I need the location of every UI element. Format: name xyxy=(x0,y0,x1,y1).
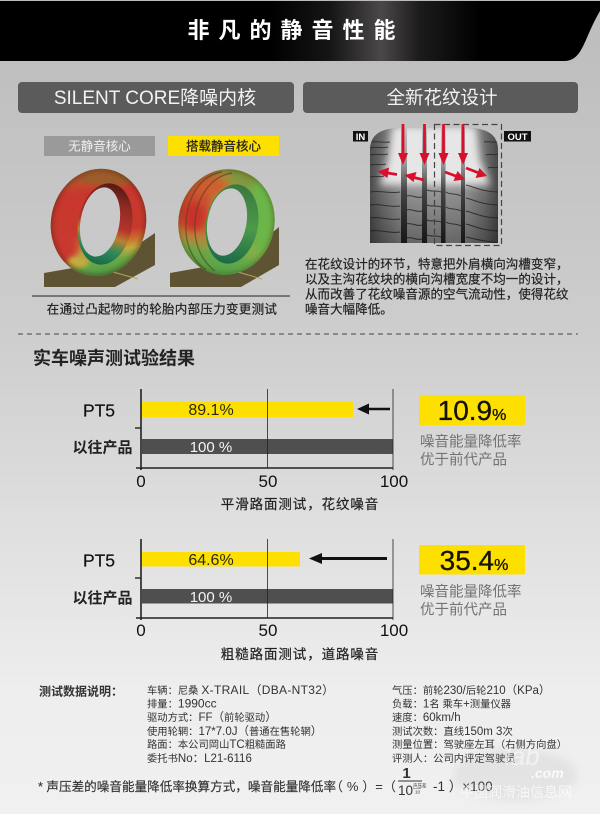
axis tick labels: 50 xyxy=(259,472,277,491)
tread description text: 噪音大幅降低。 xyxy=(305,302,393,316)
section header: new tread pattern: 全新花纹设计 xyxy=(386,87,498,108)
footnote formula: 1 xyxy=(402,765,411,782)
label: OUT: OUT xyxy=(507,132,528,143)
section header: new tread pattern xyxy=(303,82,578,113)
label: IN xyxy=(353,131,368,143)
bar: previous product 100%: 100 % xyxy=(190,589,232,606)
tread description text: 以及主沟花纹块的横向沟槽宽度不均一的设计， xyxy=(305,272,569,286)
callout: 10.9% xyxy=(419,395,525,468)
tread diagram xyxy=(370,124,502,246)
bar: PT5 64.6% xyxy=(142,552,300,569)
tire simulation: with silent core xyxy=(170,169,279,287)
category labels: PT5 xyxy=(83,400,115,420)
callout: 35.4%: 35.4% xyxy=(440,545,508,576)
bar: PT5 89.1% xyxy=(142,402,353,419)
footnote formula xyxy=(38,765,493,798)
footnote formula: （ % ）=（ xyxy=(330,779,396,794)
footnote formula: 10 xyxy=(398,783,413,798)
dashed divider xyxy=(18,333,578,335)
bar chart: rough road, road noise: 以往产品 xyxy=(72,589,133,607)
caption: rough road test: 粗糙路面测试，道路噪音 xyxy=(221,646,379,662)
callout: 35.4% xyxy=(419,545,525,618)
axis tick labels: 50 xyxy=(259,621,277,640)
callout: 10.9%: 噪音能量降低率 xyxy=(420,434,522,450)
footnote formula: -1 ）×100 xyxy=(433,779,493,794)
axis tick labels xyxy=(136,472,408,491)
callout: 35.4%: 优于前代产品 xyxy=(420,602,507,618)
test data left column: 路面：本公司岡山TC粗糙面路 xyxy=(147,738,287,751)
axis tick labels: 0 xyxy=(136,621,146,640)
test data right column: 气压：前轮230/后轮210（KPa） xyxy=(392,684,550,697)
callout: 35.4%: 噪音能量降低率 xyxy=(420,584,522,600)
label: OUT xyxy=(504,131,531,143)
bar chart: rough road, road noise xyxy=(72,539,408,640)
callout: 10.9%: 优于前代产品 xyxy=(420,452,507,468)
test data left column: 车辆：尼桑 X-TRAIL（DBA-NT32） xyxy=(147,683,334,697)
bar: PT5 64.6%: 64.6% xyxy=(188,552,234,569)
test data right column xyxy=(392,684,567,765)
section header: silent core: SILENT CORE降噪内核 xyxy=(54,87,256,109)
test data left column: 驱动方式：FF（前轮驱动） xyxy=(147,711,277,724)
footnote formula: 10 xyxy=(415,790,421,794)
tread description text: 在花纹设计的环节，特意把外肩横向沟槽变窄， xyxy=(305,256,569,272)
axis tick labels: 100 xyxy=(380,621,408,640)
caption rule xyxy=(32,295,290,297)
bar: previous product 100% xyxy=(142,439,393,456)
test data right column: 评测人：公司内评定驾驶员 xyxy=(392,752,516,765)
bar chart: smooth road, pattern noise: 以往产品 xyxy=(72,438,133,456)
test data right column: 测量位置：驾驶座左耳（右侧方向盘） xyxy=(392,738,567,751)
test data right column: 速度：60km/h xyxy=(392,711,461,724)
bar: previous product 100% xyxy=(142,589,393,606)
label: IN: IN xyxy=(356,132,365,143)
watermark: 中国润滑油信息网 xyxy=(460,784,572,800)
tread description text: 从而改善了花纹噪音源的空气流动性，使得花纹 xyxy=(305,286,569,302)
caption: tire pressure test: 在通过凸起物时的轮胎内部压力变更测试 xyxy=(47,302,277,316)
tread description text xyxy=(305,256,569,316)
test data left column: 使用轮辋：17*7.0J（普通在售轮辋） xyxy=(147,725,322,738)
heading: real vehicle noise test results: 实车噪声测试验结果 xyxy=(33,348,195,368)
axis tick labels xyxy=(136,621,408,640)
arrow xyxy=(309,553,387,564)
test data left column xyxy=(147,683,334,765)
axis tick labels: 0 xyxy=(136,472,146,491)
test data heading: 测试数据说明： xyxy=(39,684,123,698)
watermark: .com xyxy=(531,765,564,781)
bar chart: smooth road, pattern noise xyxy=(72,389,408,491)
watermark: lab xyxy=(505,741,540,771)
test data left column: 排量：1990cc xyxy=(147,696,217,710)
bar: PT5 89.1%: 89.1% xyxy=(188,402,234,419)
test data right column: 负载：1名 乘车+测量仪器 xyxy=(392,698,511,710)
label: with silent core: 搭载静音核心 xyxy=(186,138,261,154)
bar: previous product 100%: 100 % xyxy=(190,439,232,456)
header banner xyxy=(0,1,600,61)
arrow xyxy=(357,404,390,414)
title: 非凡的静音性能 xyxy=(187,18,405,43)
label: without silent core xyxy=(44,136,155,156)
test data right column: 测试次数：直线150m 3次 xyxy=(392,725,513,738)
footnote formula: 声压差 xyxy=(413,782,427,789)
label: without silent core: 无静音核心 xyxy=(68,138,131,154)
red arrows xyxy=(378,124,487,182)
axis tick labels: 100 xyxy=(380,472,408,491)
footnote formula: * 声压差的噪音能量降低率换算方式，噪音能量降低率 xyxy=(38,779,336,794)
category labels: PT5 xyxy=(83,550,115,570)
caption: smooth road test: 平滑路面测试，花纹噪音 xyxy=(221,496,379,512)
dashed highlight box xyxy=(434,124,502,246)
watermark xyxy=(453,741,577,801)
callout: 10.9%: 10.9% xyxy=(438,395,506,426)
axes xyxy=(135,539,393,620)
section header: silent core xyxy=(18,82,294,113)
tire simulation: without silent core xyxy=(44,168,155,287)
label: with silent core xyxy=(168,136,279,156)
test data left column: 委托书No：L21-6116 xyxy=(147,752,252,765)
axes xyxy=(135,389,393,470)
